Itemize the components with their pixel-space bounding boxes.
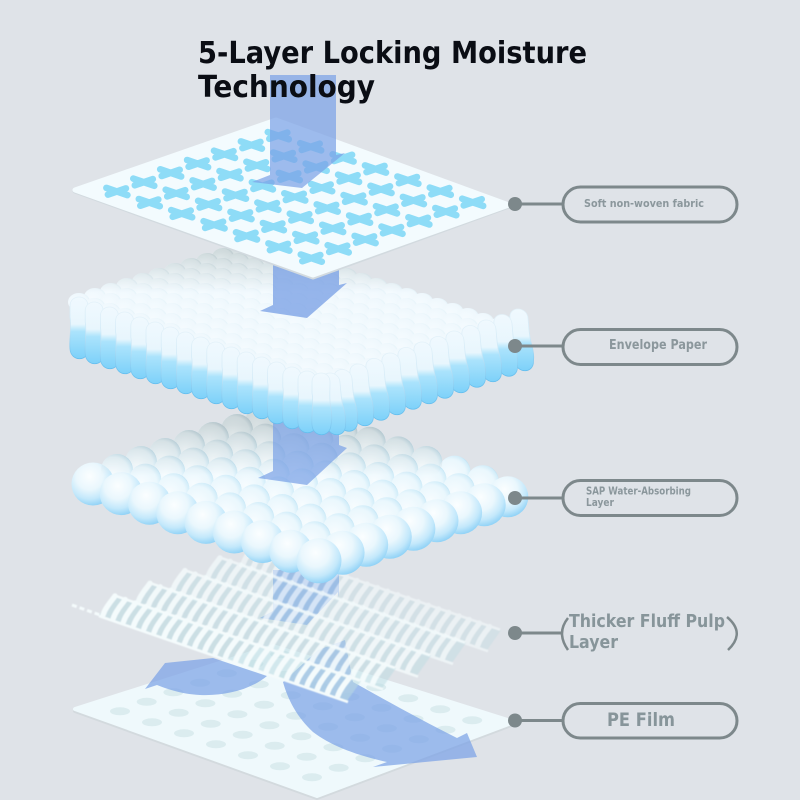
arrow: down onto SAP layer (258, 415, 347, 485)
layer 2: envelope paper (68, 238, 535, 435)
arrow: flow to the right over PE film (283, 640, 477, 767)
title: Technology (198, 70, 375, 105)
label: PE Film: PE Film (607, 709, 675, 731)
label: Thicker Fluff Pulp Layer: Layer (569, 632, 618, 653)
title: 5-Layer Locking Moisture (198, 36, 587, 71)
envelope paper left side columns (70, 297, 332, 435)
layer 4: thicker fluff pulp (72, 544, 501, 702)
label: SAP Water-Absorbing Layer (508, 480, 737, 516)
title (198, 36, 587, 105)
grey shading on the back spheres (103, 412, 442, 466)
label: PE Film (508, 704, 737, 738)
film perforation dots (110, 650, 482, 781)
label: Thicker Fluff Pulp Layer (508, 611, 737, 653)
label: Envelope Paper (508, 330, 737, 364)
label: Soft non-woven fabric (508, 187, 737, 222)
fabric blue cross pattern (106, 132, 483, 262)
envelope paper top surface (68, 248, 494, 374)
layer 1: soft non-woven fabric (75, 120, 509, 277)
label: SAP Water-Absorbing Layer: Layer (586, 497, 615, 509)
label: SAP Water-Absorbing Layer: SAP Water-Absorbing (586, 486, 691, 498)
envelope paper right side columns (321, 309, 535, 435)
label: Envelope Paper: Envelope Paper (609, 337, 707, 353)
label: Thicker Fluff Pulp Layer: Thicker Fluff Pulp (569, 611, 725, 632)
layer 5: PE film (75, 646, 514, 798)
label: Soft non-woven fabric: Soft non-woven fabric (584, 198, 704, 210)
arrow: down through fluff pulp layer (260, 570, 339, 625)
arrow: flow to the left over PE film (145, 658, 267, 695)
arrow: down onto envelope paper (260, 262, 347, 318)
arrow: down onto non-woven fabric (252, 75, 345, 188)
layer 3: SAP water-absorbing spheres (72, 398, 528, 583)
